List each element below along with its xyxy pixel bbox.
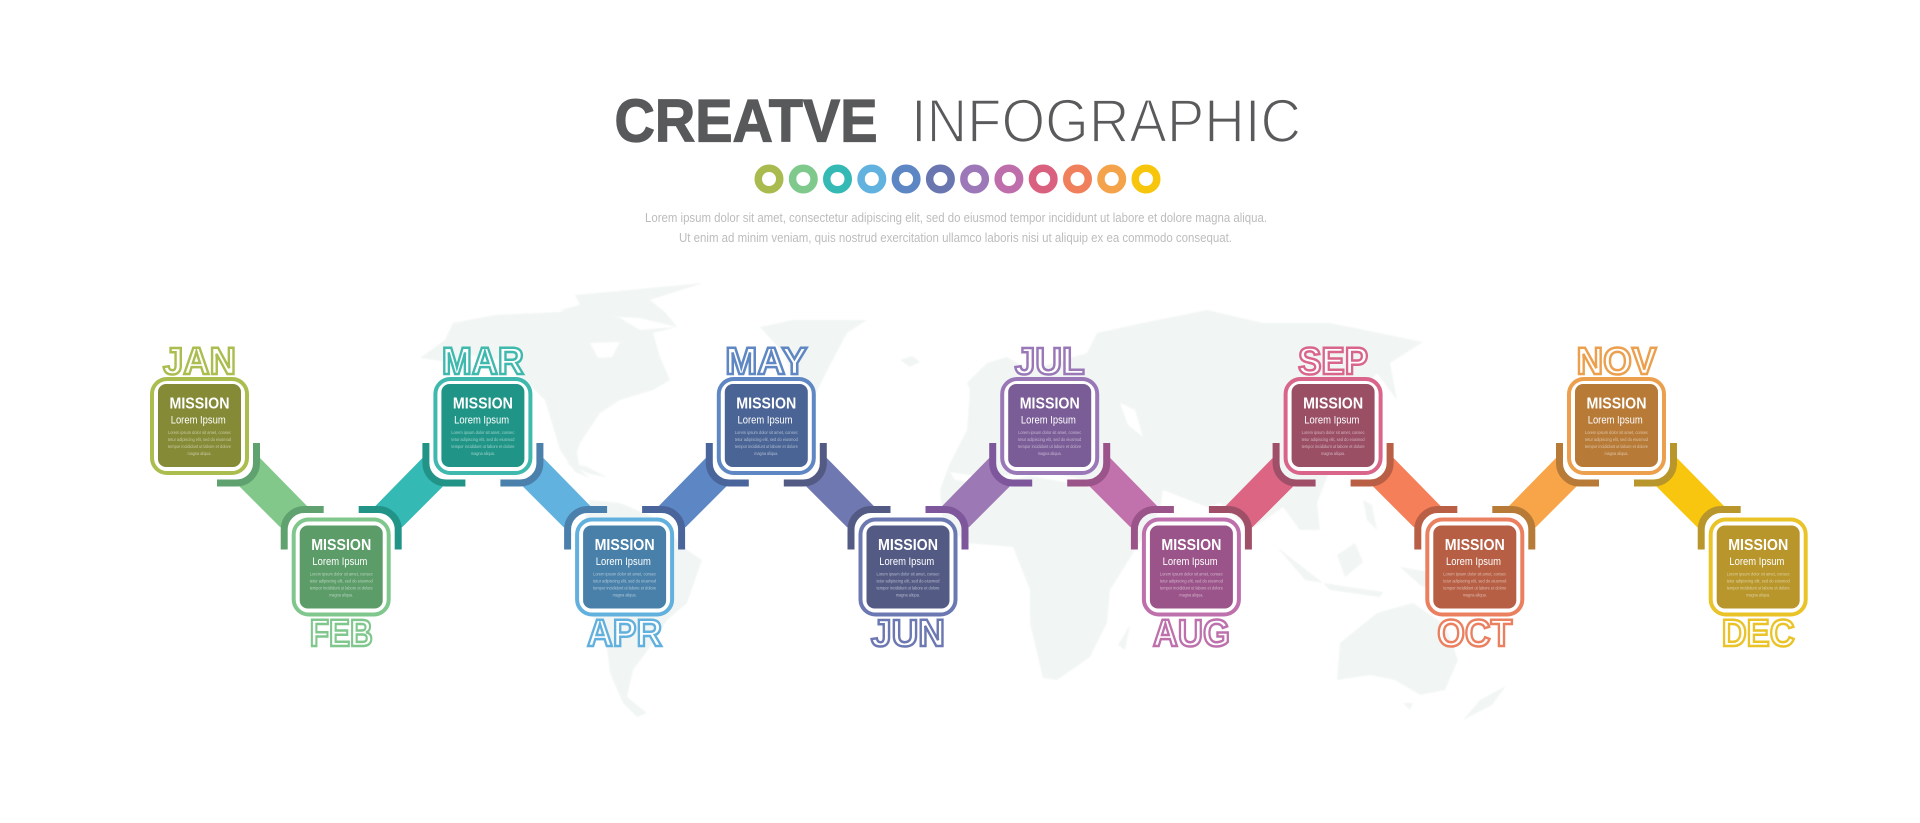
card: April: tetur adipiscing elit, sed do eiusmod xyxy=(593,578,657,584)
connector: Feb to Mar xyxy=(359,443,465,550)
card: December: Lorem Ipsum xyxy=(1729,556,1784,568)
card: October: OCT xyxy=(1437,613,1512,655)
card: May: tetur adipiscing elit, sed do eiusmod xyxy=(735,437,798,442)
connector: Aug to Sep xyxy=(1209,443,1316,550)
card: December xyxy=(1711,520,1806,655)
intro text: Ut enim ad minim veniam, quis nostrud exercitation ullamco laboris nisi ut aliquip ex ea commodo consequat. xyxy=(679,230,1232,245)
card: February: tetur adipiscing elit, sed do eiusmod xyxy=(310,578,373,584)
card: November: tempor incididunt ut labore et dolore xyxy=(1585,444,1648,449)
card: February: FEB xyxy=(310,613,373,655)
card: June xyxy=(860,520,956,655)
card: March xyxy=(435,341,530,473)
connector: Nov to Dec xyxy=(1634,443,1741,550)
card: November: Lorem ipsum dolor sit amet, consec xyxy=(1585,430,1649,435)
card: September: tetur adipiscing elit, sed do eiusmod xyxy=(1302,437,1365,442)
card: July xyxy=(1002,341,1097,473)
card: December: DEC xyxy=(1722,613,1795,655)
card: March: tempor incididunt ut labore et dolore xyxy=(451,444,515,449)
card: March: Lorem ipsum dolor sit amet, consec xyxy=(451,430,515,435)
card: May: MAY xyxy=(725,341,807,383)
card: December: magna aliqua. xyxy=(1746,592,1770,598)
card: December: tempor incididunt ut labore et dolore xyxy=(1727,586,1790,590)
card: November xyxy=(1569,341,1664,473)
card: September: Lorem ipsum dolor sit amet, consec xyxy=(1302,430,1365,435)
card: November: magna aliqua. xyxy=(1604,451,1628,456)
connector: Oct to Nov xyxy=(1492,443,1599,550)
card: May: magna aliqua. xyxy=(754,451,778,456)
card: August: Lorem Ipsum xyxy=(1163,556,1218,568)
card: June: JUN xyxy=(871,613,945,655)
card: January xyxy=(152,341,247,473)
card: January: Lorem Ipsum xyxy=(171,415,226,427)
world map background xyxy=(420,283,1506,720)
card: December: tetur adipiscing elit, sed do eiusmod xyxy=(1727,578,1790,584)
card: September: MISSION xyxy=(1303,396,1363,412)
card: July: Lorem ipsum dolor sit amet, consec xyxy=(1018,430,1082,435)
card: August: MISSION xyxy=(1161,537,1221,554)
card: August xyxy=(1144,520,1239,655)
card: October: Lorem Ipsum xyxy=(1446,556,1501,568)
colour ring row xyxy=(758,168,1157,190)
intro text: Lorem ipsum dolor sit amet, consectetur adipiscing elit, sed do eiusmod tempor incididunt ut labore et dolore magna aliqua. xyxy=(645,210,1267,225)
card: February: tempor incididunt ut labore et dolore xyxy=(310,586,373,590)
card: December: Lorem ipsum dolor sit amet, consec xyxy=(1727,572,1790,576)
card: August: magna aliqua. xyxy=(1179,592,1203,598)
card: April: APR xyxy=(587,613,662,655)
card: February: MISSION xyxy=(311,537,371,554)
card: April: magna aliqua. xyxy=(613,592,637,598)
card: March: Lorem Ipsum xyxy=(454,415,509,427)
card: August: AUG xyxy=(1153,613,1230,655)
card: July: JUL xyxy=(1015,341,1085,383)
card: April: Lorem ipsum dolor sit amet, consec xyxy=(593,572,657,576)
card: August: tetur adipiscing elit, sed do eiusmod xyxy=(1160,578,1223,584)
card: April: Lorem Ipsum xyxy=(596,556,651,568)
connector: Apr to May xyxy=(642,443,749,550)
card: October: tempor incididunt ut labore et dolore xyxy=(1443,586,1507,590)
card: September: magna aliqua. xyxy=(1321,451,1345,456)
card: January: MISSION xyxy=(170,396,230,412)
card: January: JAN xyxy=(163,341,236,383)
connector: May to Jun xyxy=(784,443,890,550)
card: July: Lorem Ipsum xyxy=(1021,415,1076,427)
card: July: MISSION xyxy=(1020,396,1080,412)
card: June: Lorem Ipsum xyxy=(879,556,934,568)
intro text xyxy=(645,210,1267,245)
connector: Jul to Aug xyxy=(1067,443,1174,550)
card: January: tetur adipiscing elit, sed do eiusmod xyxy=(168,437,231,442)
card: May: Lorem Ipsum xyxy=(737,415,792,427)
card: August: Lorem ipsum dolor sit amet, consec xyxy=(1160,572,1224,576)
card: June: magna aliqua. xyxy=(896,592,920,598)
card: January: magna aliqua. xyxy=(188,451,212,456)
card: March: magna aliqua. xyxy=(471,451,495,456)
card: July: tempor incididunt ut labore et dolore xyxy=(1018,444,1082,449)
card: February xyxy=(294,520,389,655)
card: June: tetur adipiscing elit, sed do eiusmod xyxy=(876,578,940,584)
card: November: tetur adipiscing elit, sed do eiusmod xyxy=(1585,437,1648,442)
title: INFOGRAPHIC xyxy=(911,87,1301,155)
card: May: MISSION xyxy=(736,396,796,412)
connector: Jun to Jul xyxy=(925,443,1032,550)
connector: Sep to Oct xyxy=(1351,443,1457,550)
card: November: MISSION xyxy=(1586,396,1646,412)
connector: Mar to Apr xyxy=(500,443,607,550)
card: September: Lorem Ipsum xyxy=(1304,415,1359,427)
card: May: tempor incididunt ut labore et dolore xyxy=(735,444,798,449)
card: October: tetur adipiscing elit, sed do eiusmod xyxy=(1443,578,1507,584)
card: November: Lorem Ipsum xyxy=(1588,415,1643,427)
card: June: MISSION xyxy=(878,537,938,554)
card: October: magna aliqua. xyxy=(1463,592,1487,598)
card: June: tempor incididunt ut labore et dolore xyxy=(876,586,940,590)
card: November: NOV xyxy=(1576,341,1657,383)
card: February: Lorem ipsum dolor sit amet, consec xyxy=(310,572,373,576)
card: October: Lorem ipsum dolor sit amet, consec xyxy=(1443,572,1507,576)
card: September xyxy=(1286,341,1381,473)
card: May: Lorem ipsum dolor sit amet, consec xyxy=(735,430,798,435)
card: October xyxy=(1427,520,1522,655)
title: CREATVE xyxy=(614,88,878,154)
card: July: magna aliqua. xyxy=(1038,451,1062,456)
card: August: tempor incididunt ut labore et dolore xyxy=(1160,586,1223,590)
title xyxy=(614,87,1301,155)
card: July: tetur adipiscing elit, sed do eiusmod xyxy=(1018,437,1082,442)
card: February: Lorem Ipsum xyxy=(312,556,367,568)
card: April: MISSION xyxy=(595,537,655,554)
card: March: MAR xyxy=(442,341,524,383)
card: April xyxy=(577,520,672,655)
card: September: SEP xyxy=(1298,341,1368,383)
card: May xyxy=(719,341,814,473)
card: March: MISSION xyxy=(453,396,513,412)
card: January: tempor incididunt ut labore et dolore xyxy=(168,444,231,449)
card: October: MISSION xyxy=(1445,537,1505,554)
card: February: magna aliqua. xyxy=(329,592,353,598)
card: January: Lorem ipsum dolor sit amet, consec xyxy=(168,430,232,435)
card: April: tempor incididunt ut labore et dolore xyxy=(593,586,657,590)
card: June: Lorem ipsum dolor sit amet, consec xyxy=(876,572,940,576)
connector: Jan to Feb xyxy=(217,443,324,550)
card: December: MISSION xyxy=(1728,537,1788,554)
card: September: tempor incididunt ut labore et dolore xyxy=(1302,444,1365,449)
card: March: tetur adipiscing elit, sed do eiusmod xyxy=(451,437,515,442)
